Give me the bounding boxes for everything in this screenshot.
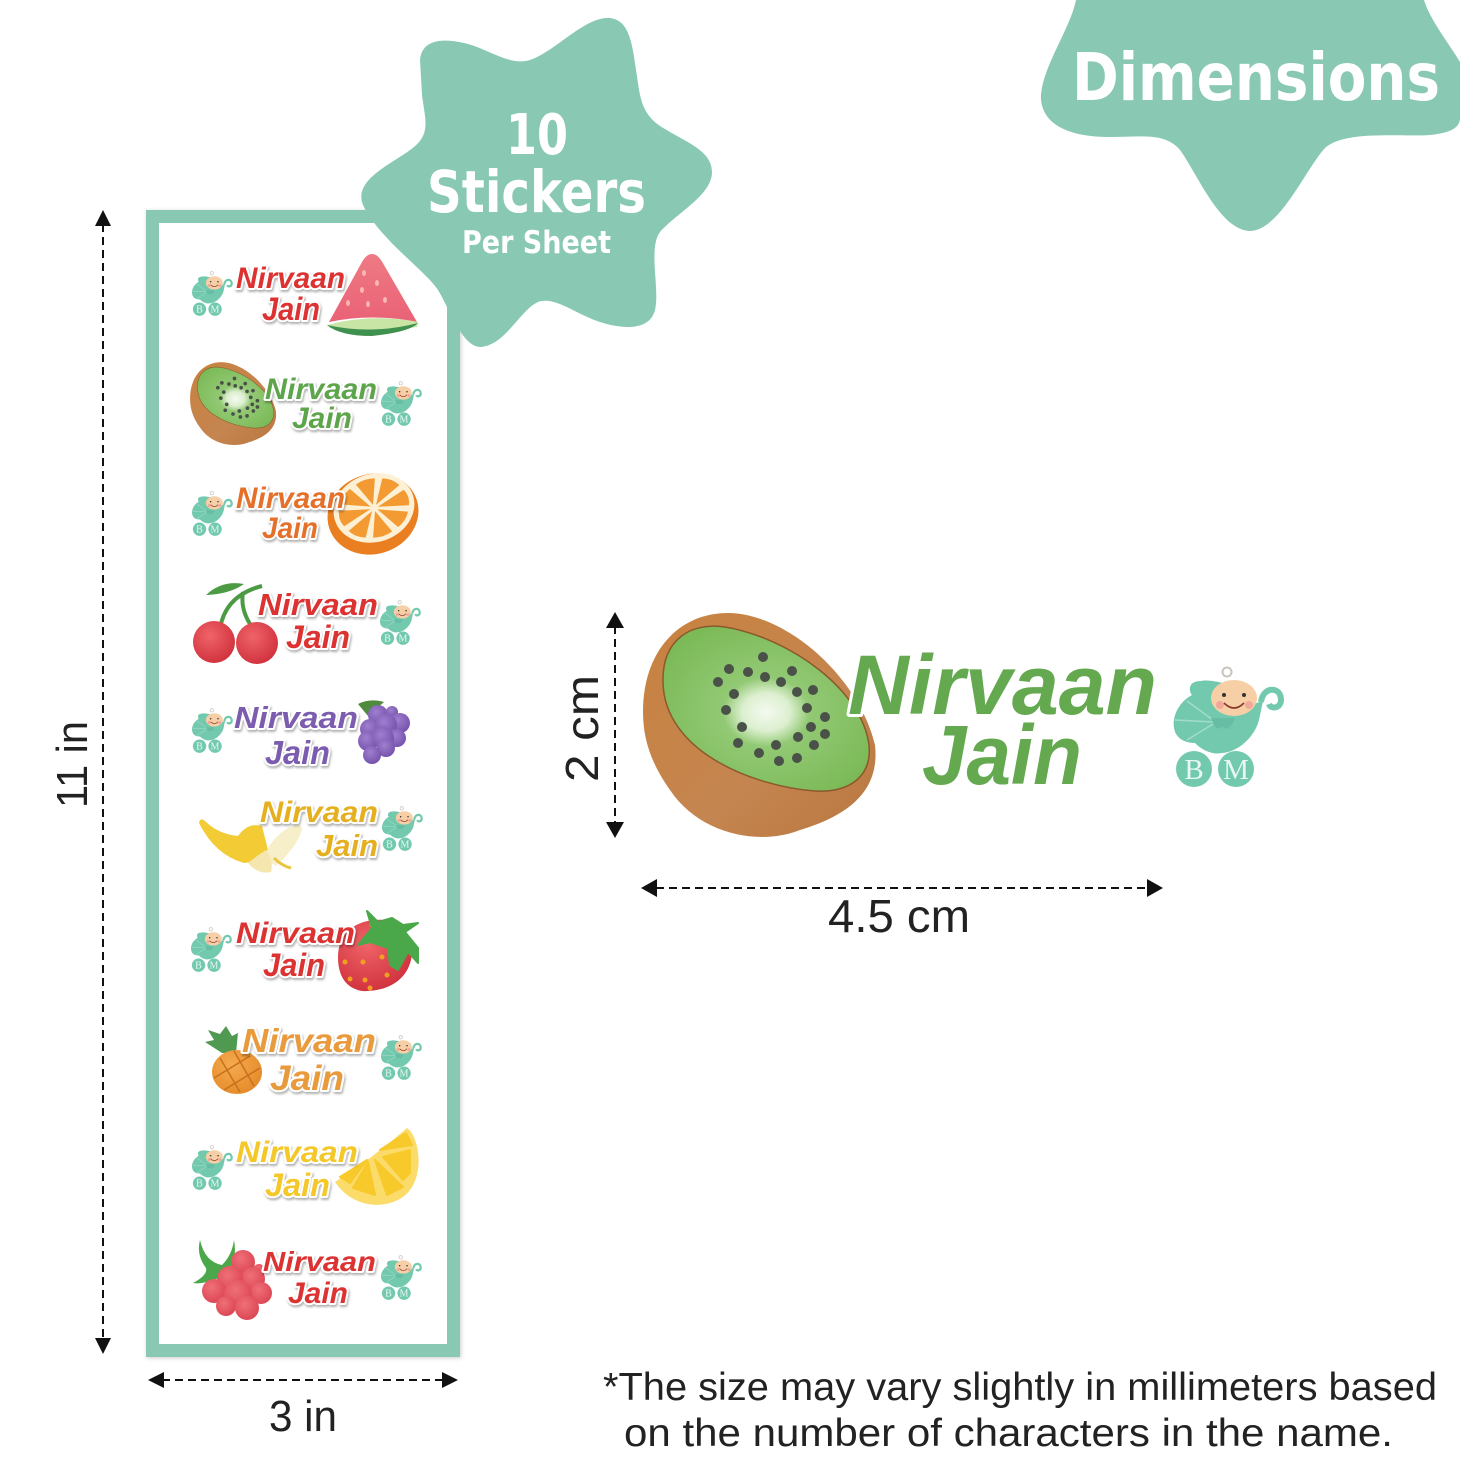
- sticker: raspberry: [193, 1240, 421, 1320]
- sticker: lemon: M: [211, 1178, 220, 1190]
- sticker: cherries: Jain: [286, 619, 350, 655]
- sticker: banana: B: [386, 840, 393, 850]
- sticker: strawberry: M: [210, 960, 219, 972]
- sticker: enlarged kiwi: M: [1223, 754, 1249, 786]
- sticker: raspberry: M: [400, 1288, 409, 1300]
- sticker: banana: [199, 796, 422, 873]
- label: 2 cm: 2 cm: [556, 675, 608, 782]
- sticker: watermelon: B: [196, 304, 203, 316]
- sticker: grapes: [192, 700, 410, 771]
- sticker: banana: Jain: [316, 828, 378, 863]
- footnote: *The size may vary slightly in millimeters based: [603, 1366, 1437, 1409]
- sticker: orange: M: [211, 524, 220, 536]
- sticker: grapes: Jain: [265, 734, 330, 771]
- sticker: lemon: Nirvaan: [236, 1136, 358, 1169]
- arrow: sheet height: [95, 210, 111, 1354]
- sticker: enlarged kiwi: B: [1184, 754, 1204, 786]
- sticker: watermelon: Jain: [262, 291, 320, 327]
- panel: sticker sheet: [152, 216, 454, 1350]
- sticker: enlarged kiwi: [643, 613, 1281, 837]
- sticker: grapes: Nirvaan: [234, 700, 358, 735]
- sticker: strawberry: Jain: [263, 947, 325, 983]
- sticker: strawberry: B: [195, 960, 202, 972]
- sticker: cherries: [193, 583, 420, 664]
- footnote: [603, 1366, 1437, 1455]
- sticker: pineapple: B: [385, 1068, 392, 1080]
- sticker: cherries: Nirvaan: [258, 587, 378, 622]
- sticker: kiwi: Jain: [292, 402, 352, 435]
- sticker: enlarged kiwi: Nirvaan: [848, 638, 1157, 732]
- label: 3 in: 3 in: [269, 1392, 337, 1441]
- sticker: kiwi: Nirvaan: [265, 373, 377, 406]
- sticker: pineapple: Nirvaan: [242, 1022, 376, 1059]
- sticker: enlarged kiwi: Jain: [922, 708, 1082, 802]
- sticker: kiwi: M: [400, 414, 409, 426]
- label: 11 in: 11 in: [48, 721, 97, 808]
- footnote: on the number of characters in the name.: [624, 1412, 1393, 1455]
- badge: dimensions heading: [1041, 0, 1460, 231]
- arrow: sheet width: [148, 1372, 458, 1388]
- arrow: sticker height: [606, 612, 624, 838]
- sticker: kiwi: [190, 362, 421, 445]
- sticker: cherries: B: [384, 634, 391, 644]
- sticker: raspberry: B: [385, 1288, 392, 1300]
- sticker: raspberry: Nirvaan: [263, 1246, 376, 1277]
- sticker: orange: B: [196, 524, 203, 536]
- badge: 10 stickers per sheet: Per Sheet: [462, 225, 611, 261]
- sticker: watermelon: Nirvaan: [236, 262, 345, 295]
- sticker: watermelon: [192, 254, 418, 336]
- sticker: cherries: M: [399, 634, 408, 644]
- badge: 10 stickers per sheet: [361, 18, 712, 347]
- sticker: watermelon: M: [211, 304, 220, 316]
- sticker: orange: [192, 462, 429, 566]
- sticker: grapes: M: [211, 742, 220, 752]
- badge: 10 stickers per sheet: Stickers: [427, 158, 646, 226]
- sticker: orange: Jain: [262, 512, 318, 545]
- label: 4.5 cm: 4.5 cm: [828, 890, 970, 942]
- sticker: lemon: [192, 1128, 419, 1205]
- sticker: kiwi: B: [385, 414, 392, 426]
- sticker: lemon: B: [196, 1178, 203, 1190]
- sticker: banana: M: [401, 840, 410, 850]
- sticker: strawberry: Nirvaan: [236, 917, 355, 950]
- sticker: banana: Nirvaan: [260, 796, 378, 829]
- badge: 10 stickers per sheet: 10: [506, 103, 568, 168]
- sticker: pineapple: [205, 1022, 421, 1098]
- sticker: pineapple: M: [400, 1068, 409, 1080]
- sticker: strawberry: [191, 911, 418, 991]
- sticker: lemon: Jain: [265, 1167, 330, 1203]
- sticker: grapes: B: [196, 742, 203, 752]
- sticker: raspberry: Jain: [288, 1277, 348, 1310]
- sticker: pineapple: Jain: [270, 1059, 344, 1098]
- sticker: orange: Nirvaan: [236, 482, 345, 515]
- arrow: sticker width: [641, 879, 1163, 897]
